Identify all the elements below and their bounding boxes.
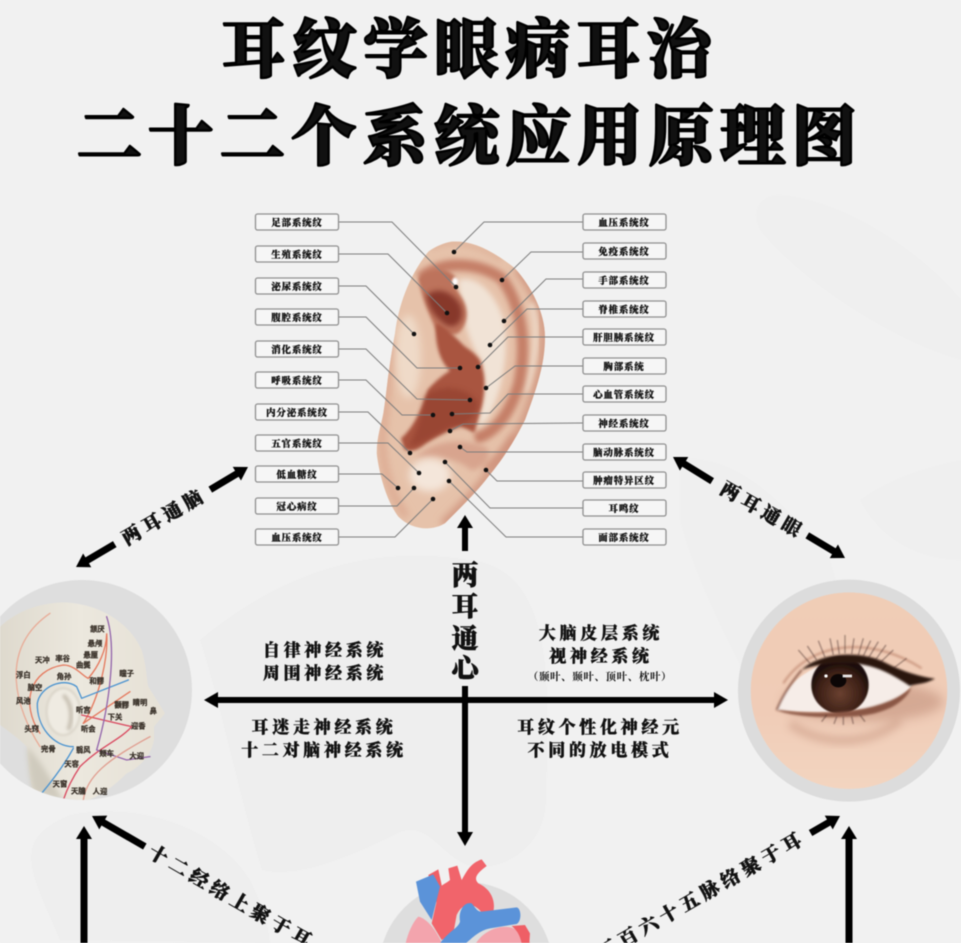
circle backdrop — [379, 882, 553, 943]
head with meridians: 听会 — [81, 725, 96, 734]
head with meridians: 颔厌 — [90, 625, 105, 634]
left label boxes: 冠心病纹 — [276, 501, 318, 513]
label: 两耳通脑 with arrows: 两耳通脑 — [118, 483, 211, 550]
right label boxes: 肿瘤特异区纹 — [593, 475, 655, 487]
heart illustration — [405, 859, 532, 943]
circle ring — [738, 580, 960, 802]
left label boxes: 消化系统纹 — [271, 344, 323, 356]
left label boxes: 足部系统纹 — [271, 217, 323, 229]
background soft shapes — [31, 195, 961, 943]
circle backdrop — [0, 580, 192, 800]
right lower text: 耳纹个性化神经元 — [517, 717, 683, 737]
head with meridians: 天窗 — [53, 780, 67, 789]
down arrow to heart — [457, 686, 473, 846]
head circle — [0, 580, 192, 802]
label: 两耳通眼 with arrows: 两耳通眼 — [716, 477, 809, 544]
left upper text: 自律神经系统 — [263, 640, 387, 660]
right upper text: 视神经系统 — [549, 646, 653, 666]
vertical label: 两耳通心: 两 — [452, 560, 478, 591]
right label boxes: 脑动脉系统纹 — [593, 447, 655, 459]
left label boxes: 五官系统纹 — [271, 438, 323, 450]
right label boxes: 胸部系统 — [603, 361, 645, 373]
label: 十二经络上聚于耳 with arrow — [88, 809, 319, 943]
head with meridians: 瞳子 — [119, 669, 135, 678]
left upper text — [263, 640, 387, 683]
head with meridians: 睛明 — [133, 698, 147, 707]
left lower text: 耳迷走神经系统 — [252, 717, 396, 737]
vertical label: 两耳通心: 通 — [452, 624, 478, 654]
right label boxes: 心血管系统纹 — [593, 389, 655, 401]
title line 2: 二十二个系统应用原理图 — [77, 102, 863, 174]
right label boxes: 免疫系统纹 — [598, 246, 650, 258]
head with meridians: 天冲 — [35, 656, 50, 665]
up arrow to ear — [457, 515, 473, 551]
head with meridians: 颧髎 — [114, 700, 130, 709]
head with meridians: 颊车 — [99, 749, 114, 758]
right label boxes: 面部系统纹 — [598, 532, 650, 544]
label: 两耳通眼 with arrows — [669, 450, 849, 565]
left lower text — [241, 717, 407, 760]
left bottom up arrow — [76, 826, 92, 943]
central cross arrows — [204, 515, 728, 846]
ear diagram — [256, 214, 666, 545]
right label boxes: 肝胆胰系统纹 — [593, 332, 655, 344]
right label boxes — [583, 214, 666, 545]
left label boxes: 泌尿系统纹 — [271, 281, 323, 293]
head with meridians: 率谷 — [55, 654, 71, 663]
head with meridians: 人迎 — [93, 787, 108, 796]
head with meridians: 大迎 — [129, 751, 145, 760]
head with meridians: 完骨 — [41, 745, 56, 754]
acupoint dots — [396, 250, 506, 501]
head with meridians: 风池 — [16, 696, 31, 705]
head with meridians: 浮白 — [16, 670, 31, 679]
right connector lines — [445, 222, 583, 537]
left label boxes: 生殖系统纹 — [271, 249, 323, 261]
left upper text: 周围神经系统 — [263, 663, 387, 683]
head with meridians: 脑空 — [28, 683, 42, 692]
head with meridians: 头窍 — [24, 725, 39, 734]
left label boxes: 呼吸系统纹 — [271, 375, 323, 387]
right label boxes: 脊椎系统纹 — [598, 304, 650, 316]
right upper text: 大脑皮层系统 — [539, 623, 663, 643]
vertical label: 两耳通心: 心 — [452, 654, 484, 684]
right upper text: （颞叶、颞叶、顶叶、枕叶） — [528, 670, 672, 683]
head with meridians: 曲鬓 — [76, 660, 91, 669]
vertical label: 两耳通心: 耳 — [452, 592, 478, 622]
right bottom up arrow — [841, 826, 857, 943]
head with meridians — [0, 602, 165, 802]
heart circle — [379, 859, 553, 943]
head with meridians: 天牖 — [71, 786, 86, 795]
left label boxes — [256, 214, 338, 545]
ear illustration — [372, 237, 552, 533]
horizontal double arrow — [204, 692, 728, 708]
head with meridians: 角孙 — [57, 672, 72, 681]
head with meridians: 鼻 — [150, 706, 157, 715]
head with meridians: 迎香 — [131, 721, 146, 730]
vertical label: 两耳通心 — [452, 560, 484, 684]
left label boxes: 腹腔系统纹 — [271, 312, 323, 324]
title — [77, 15, 863, 174]
right label boxes: 耳鸣纹 — [609, 503, 639, 515]
eye circle — [738, 580, 960, 802]
head with meridians: 悬厘 — [83, 650, 99, 659]
right upper text — [528, 623, 672, 683]
right label boxes: 手部系统纹 — [598, 275, 650, 287]
right label boxes: 血压系统纹 — [598, 217, 650, 229]
left connector lines — [339, 222, 470, 537]
head with meridians: 翳风 — [76, 746, 91, 755]
eye photo — [751, 592, 947, 789]
left label boxes: 血压系统纹 — [271, 532, 323, 544]
head with meridians: 下关 — [108, 712, 123, 721]
left lower text: 十二对脑神经系统 — [241, 740, 407, 760]
head with meridians: 听宫 — [76, 706, 91, 715]
left label boxes: 低血糖纹 — [276, 469, 318, 481]
label: 两耳通脑 with arrows — [72, 460, 252, 574]
right lower text — [517, 717, 683, 760]
title line 1: 耳纹学眼病耳治 — [222, 15, 718, 86]
head with meridians: 天容 — [64, 760, 80, 769]
left label boxes: 内分泌系统纹 — [266, 407, 328, 419]
right label boxes: 神经系统纹 — [598, 418, 650, 430]
head with meridians: 和髎 — [89, 676, 105, 685]
head with meridians: 悬颅 — [88, 639, 103, 648]
right lower text: 不同的放电模式 — [528, 740, 672, 760]
